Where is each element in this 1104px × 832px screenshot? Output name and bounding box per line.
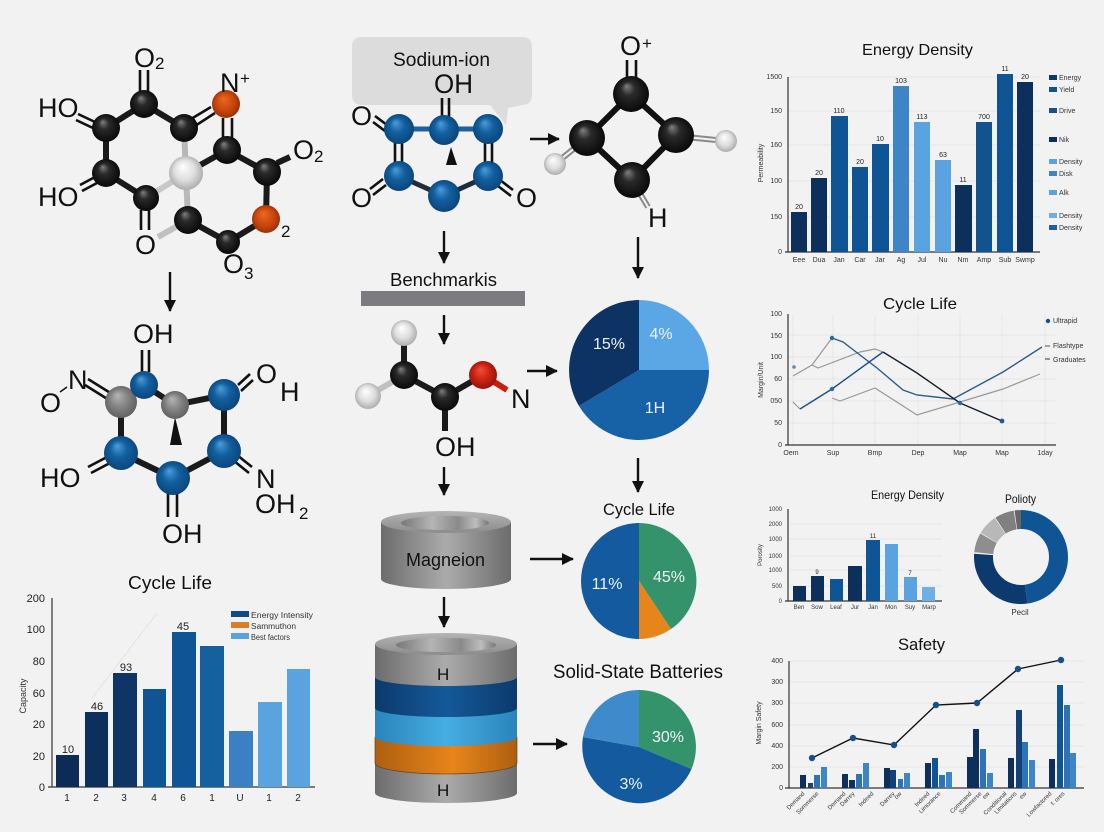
bar chart: cycle life bottom-left: 0 [39, 782, 45, 794]
bar chart: energy density small: 0 [779, 599, 783, 605]
bar chart: energy density top-right: Amp [977, 257, 991, 264]
bar chart: energy density top-right: 100 [770, 178, 782, 185]
chart legend: Density [1059, 213, 1083, 220]
bar chart: energy density top-right: Nm [958, 257, 969, 264]
bar chart: energy density top-right: 1500 [766, 74, 782, 81]
line chart: cycle life right: 60 [774, 376, 782, 383]
bar chart: cycle life bottom-left: 1 [209, 793, 215, 804]
bar chart: energy density top-right: 20 [795, 204, 803, 211]
bar chart: energy density top-right: 20 [1021, 74, 1029, 81]
molecule: sodium-ion blue ring: OH [434, 69, 473, 99]
molecule: top-left black ring: + [240, 69, 250, 88]
molecule: small chain with red atom: N [511, 384, 530, 414]
molecule: blue and gray ring: OH [133, 319, 174, 349]
chart legend: Nik [1059, 137, 1070, 144]
molecule: blue and gray ring: N [68, 365, 88, 395]
bar chart: energy density small: 1000 [769, 507, 783, 513]
combo chart: safety: ow [894, 791, 904, 801]
bar chart: cycle life bottom-left: Capacity [18, 678, 28, 714]
molecule: small chain with red atom [355, 320, 530, 462]
molecule: top-left black ring: 2 [155, 54, 164, 73]
chart legend: Sammuthon [251, 622, 296, 631]
bar chart: cycle life bottom-left: 2 [295, 793, 301, 804]
combo chart: safety: Demand [827, 791, 847, 811]
bar chart: energy density top-right: 20 [856, 159, 864, 166]
line chart: cycle life right: Map [995, 450, 1009, 457]
molecule: top-left black ring: 2 [314, 147, 323, 166]
chart title: Cycle Life [128, 573, 212, 593]
line chart: cycle life right: 100 [770, 311, 782, 318]
bar chart: energy density top-right: 700 [978, 114, 990, 121]
molecule: top-left black ring: HO [38, 182, 78, 212]
combo chart: safety: ew [1019, 791, 1029, 801]
bar chart: cycle life bottom-left: 200 [27, 593, 45, 605]
bar chart: energy density small: Jur [851, 605, 859, 611]
molecule: blue and gray ring: N [256, 464, 276, 494]
combo chart: safety: 300 [771, 700, 783, 707]
heading: Benchmarks [361, 270, 525, 306]
bar chart: energy density top-right: 160 [770, 142, 782, 149]
bar chart: cycle life bottom-left: 1 [64, 793, 70, 804]
bar chart: energy density top-right: 150 [770, 108, 782, 115]
molecule: sodium-ion blue ring: O [516, 183, 537, 213]
molecule: sodium-ion blue ring [351, 50, 537, 213]
bar chart: energy density top-right: Car [854, 257, 866, 264]
molecule: top-left black ring: 3 [244, 264, 253, 283]
bar chart: energy density top-right: 150 [770, 214, 782, 221]
molecule: top-left black ring: O [134, 43, 155, 73]
pie chart: 30% / 3%: 30% [652, 729, 684, 746]
cylinder: layered cell stack: H [437, 781, 449, 800]
cylinder: layered cell stack: H [437, 665, 449, 684]
bar chart: energy density small: 2000 [769, 522, 783, 528]
pie chart: 30% / 3%: 3% [619, 776, 643, 793]
chart legend [231, 611, 313, 642]
molecule: black square ring: + [642, 34, 652, 53]
combo chart: safety: Lowfactored [1026, 791, 1053, 819]
cylinder: Magnesion cell: Magneion [406, 550, 485, 570]
chart legend: Density [1059, 225, 1083, 232]
bar chart: energy density top-right: Eee [793, 257, 805, 264]
combo chart: safety: Margin Safety [756, 701, 763, 745]
bar chart: energy density small: Mon [885, 605, 897, 611]
molecule: sodium-ion blue ring: O [351, 101, 372, 131]
heading: Benchmarks: Benchmarkis [390, 270, 497, 290]
bar chart: energy density top-right: 63 [939, 152, 947, 159]
line chart: cycle life right: Bmp [868, 450, 882, 457]
chart title: Energy Density [862, 42, 973, 59]
pie chart: 15% / 4% / 1H: 15% [593, 336, 625, 353]
molecule: blue and gray ring: O [40, 388, 61, 418]
bar chart: energy density top-right: Jar [875, 257, 886, 264]
molecule: top-left black ring [38, 43, 323, 283]
pie chart: 15% / 4% / 1H: 1H [645, 400, 665, 417]
chart title: Cycle Life [883, 296, 957, 313]
line chart: cycle life right: 050 [770, 398, 782, 405]
arrow: stack to solid-state pie [533, 743, 567, 745]
bar chart: cycle life bottom-left: 1 [266, 793, 272, 804]
molecule: blue and gray ring: HO [40, 463, 80, 493]
chart legend [1049, 75, 1083, 232]
bar chart: energy density top-right: 113 [916, 114, 928, 121]
molecule: black square ring: O [620, 31, 641, 61]
arrow: sodium-ion down to benchmarks [443, 231, 445, 263]
bar chart: energy density top-right: Dua [813, 257, 826, 264]
chart legend: Yield [1059, 87, 1074, 94]
bar chart: energy density top-right [758, 42, 1083, 264]
molecule: blue and gray ring: H [280, 377, 300, 407]
molecule: top-left black ring: N [220, 68, 240, 98]
donut chart: polarity: Pecil [1011, 608, 1029, 617]
combo chart: safety: Indeed [914, 791, 931, 808]
molecule: blue and gray ring: 2 [299, 504, 308, 523]
bar chart: cycle life bottom-left: 100 [27, 624, 45, 636]
arrow: molecule 1 to molecule 2 [169, 272, 171, 311]
bar chart: cycle life bottom-left: 6 [180, 793, 186, 804]
bar chart: energy density top-right: 0 [778, 249, 782, 256]
bar chart: energy density top-right: 11 [1001, 66, 1009, 73]
bar chart: energy density top-right: 20 [815, 170, 823, 177]
bar chart: cycle life bottom-left: 2 [93, 793, 99, 804]
bar chart: energy density small: 9 [815, 570, 819, 576]
bar chart: cycle life bottom-left [18, 573, 315, 804]
molecule: blue and gray ring: O [256, 359, 277, 389]
bar chart: energy density small: 1000 [769, 537, 783, 543]
combo chart: safety: 0 [779, 785, 783, 792]
pie chart: 15% / 4% / 1H: 4% [649, 326, 673, 343]
pie chart: 11% / 45%: 45% [653, 569, 685, 586]
line chart: cycle life right: Map [953, 450, 967, 457]
bar chart: cycle life bottom-left: 80 [33, 656, 45, 668]
pie chart: 15% / 4% / 1H [569, 300, 709, 440]
combo chart: safety: Demand [786, 791, 806, 811]
bar chart: energy density small: 1000 [769, 568, 783, 574]
molecule: blue and gray ring: OH [162, 519, 202, 549]
molecule: blue and gray ring [40, 319, 308, 549]
arrow: sodium-ion to black ring [530, 138, 559, 140]
combo chart: safety: 200 [771, 764, 783, 771]
bar chart: cycle life bottom-left: 3 [121, 793, 127, 804]
bar chart: energy density small: Marp [922, 605, 936, 611]
bar chart: energy density top-right: Nu [939, 257, 948, 264]
pie chart: 11% / 45% [581, 523, 696, 639]
bar chart: energy density top-right: 110 [833, 108, 845, 115]
chart legend: Density [1059, 159, 1083, 166]
bar chart: energy density top-right: Sub [999, 257, 1011, 264]
molecule: top-left black ring: HO [38, 93, 78, 123]
bar chart: energy density small: Porosity [758, 544, 764, 566]
line chart: cycle life right: Dep [912, 450, 925, 457]
combo chart: safety: Sommerse [959, 791, 984, 816]
bar chart: cycle life bottom-left: 10 [62, 744, 74, 756]
arrow: black ring down to pie [637, 237, 639, 278]
combo chart: safety: Darrey [879, 791, 896, 808]
pie chart: 11% / 45%: 11% [592, 576, 622, 593]
bar chart: energy density top-right: 10 [876, 136, 884, 143]
combo chart: safety: Limitations [994, 791, 1018, 816]
bar chart: energy density top-right: 103 [895, 78, 907, 85]
bar chart: energy density top-right: Swmp [1015, 257, 1035, 264]
bar chart: energy density small: Ben [794, 605, 804, 611]
molecule: sodium-ion blue ring: O [351, 183, 372, 213]
bar chart: cycle life bottom-left: 93 [120, 662, 132, 674]
chart legend [1045, 318, 1086, 364]
line chart: cycle life right: Sup [827, 450, 839, 457]
arrow: magnesium cell down to stack [443, 597, 445, 627]
combo chart: safety: f. ores [1050, 791, 1066, 807]
heading: Solid-State Batteries: Solid-State Batteries [553, 662, 723, 683]
combo chart: safety: Conditional [983, 791, 1008, 817]
arrow: benchmarks down to molecule [443, 315, 445, 344]
line chart: cycle life right: 1day [1037, 450, 1053, 457]
heading: Cycle Life (pie): Cycle Life [603, 500, 675, 519]
bar chart: energy density small: 11 [870, 534, 877, 540]
callout: sodium-ion speech bubble [352, 37, 532, 125]
cylinder: layered cell stack [375, 633, 517, 803]
arrow: pie down to cycle life [637, 458, 639, 492]
chart legend: Ultrapid [1053, 318, 1077, 325]
molecule: top-left black ring: O [223, 249, 244, 279]
label: Sodium-ion: Sodium-ion [393, 50, 490, 71]
arrow: chain down to magnesium cell [443, 467, 445, 495]
line chart: cycle life right: 100 [770, 354, 782, 361]
combo chart: safety: Indeed [858, 791, 875, 808]
bar chart: cycle life bottom-left: 60 [33, 688, 45, 700]
chart legend: Energy Intensity [251, 611, 313, 620]
line chart: cycle life right: 0 [778, 442, 782, 449]
molecule: black square ring [544, 31, 737, 233]
line chart: cycle life right: Oem [783, 450, 799, 457]
bar chart: energy density top-right: Permeability [758, 143, 765, 182]
molecule: blue and gray ring: OH [255, 489, 296, 519]
bar chart: energy density small: 7 [908, 571, 912, 577]
combo chart: safety: Command [950, 791, 973, 815]
arrow: chain to pie [527, 370, 557, 372]
line chart: cycle life right: 150 [770, 333, 782, 340]
chart legend: Drive [1059, 108, 1075, 115]
bar chart: cycle life bottom-left: 20 [33, 751, 45, 763]
combo chart: safety: 400 [771, 743, 783, 750]
combo chart: safety [756, 635, 1084, 819]
bar chart: energy density small: 500 [772, 584, 783, 590]
chart legend: Best factors [251, 633, 290, 642]
chart title: Polioty [1005, 492, 1036, 506]
molecule: top-left black ring: O [293, 135, 314, 165]
bar chart: energy density small: Jan [868, 605, 878, 611]
bar chart: energy density small: Suy [905, 605, 915, 611]
arrow: magnesium cell to pie [530, 558, 573, 560]
bar chart: energy density top-right: Ag [897, 257, 905, 264]
chart legend: Alk [1059, 190, 1069, 197]
bar chart: energy density small [758, 488, 944, 611]
donut chart: polarity [984, 492, 1058, 617]
chart legend: Disk [1059, 171, 1073, 178]
molecule: black square ring: H [648, 203, 668, 233]
pie chart: 30% / 3% [582, 690, 696, 803]
molecule: top-left black ring: 2 [281, 222, 290, 241]
chart legend: Flashtype [1053, 343, 1083, 350]
bar chart: energy density small: Sow [811, 605, 824, 611]
bar chart: energy density top-right: 11 [959, 177, 967, 184]
chart title: Energy Density [871, 488, 944, 502]
bar chart: energy density small: 1000 [769, 554, 783, 560]
combo chart: safety: 400 [771, 658, 783, 665]
line chart: cycle life right: Margin/Unit [758, 362, 765, 398]
bar chart: cycle life bottom-left: 4 [151, 793, 157, 804]
combo chart: safety: 600 [771, 722, 783, 729]
molecule: top-left black ring: O [135, 230, 156, 260]
combo chart: safety: ew [982, 791, 992, 801]
bar chart: cycle life bottom-left: 45 [177, 621, 189, 633]
chart title: Safety [898, 635, 945, 654]
bar chart: cycle life bottom-left: 20 [33, 719, 45, 731]
bar chart: cycle life bottom-left: U [236, 793, 244, 804]
combo chart: safety: 300 [771, 679, 783, 686]
chart legend: Graduates [1053, 357, 1086, 364]
line chart: cycle life right [758, 296, 1086, 457]
line chart: cycle life right: 50 [774, 420, 782, 427]
molecule: small chain with red atom: OH [435, 432, 476, 462]
bar chart: energy density small: Leaf [830, 605, 842, 611]
combo chart: safety: Sommerse [796, 791, 821, 816]
combo chart: safety: Darrey [839, 791, 856, 808]
chart legend: Energy [1059, 75, 1082, 82]
cylinder: Magnesion cell [381, 511, 511, 589]
combo chart: safety: Limorance [918, 791, 943, 815]
bar chart: cycle life bottom-left: 46 [91, 701, 103, 713]
bar chart: energy density top-right: Jul [918, 257, 927, 264]
bar chart: energy density top-right: Jan [833, 257, 845, 264]
